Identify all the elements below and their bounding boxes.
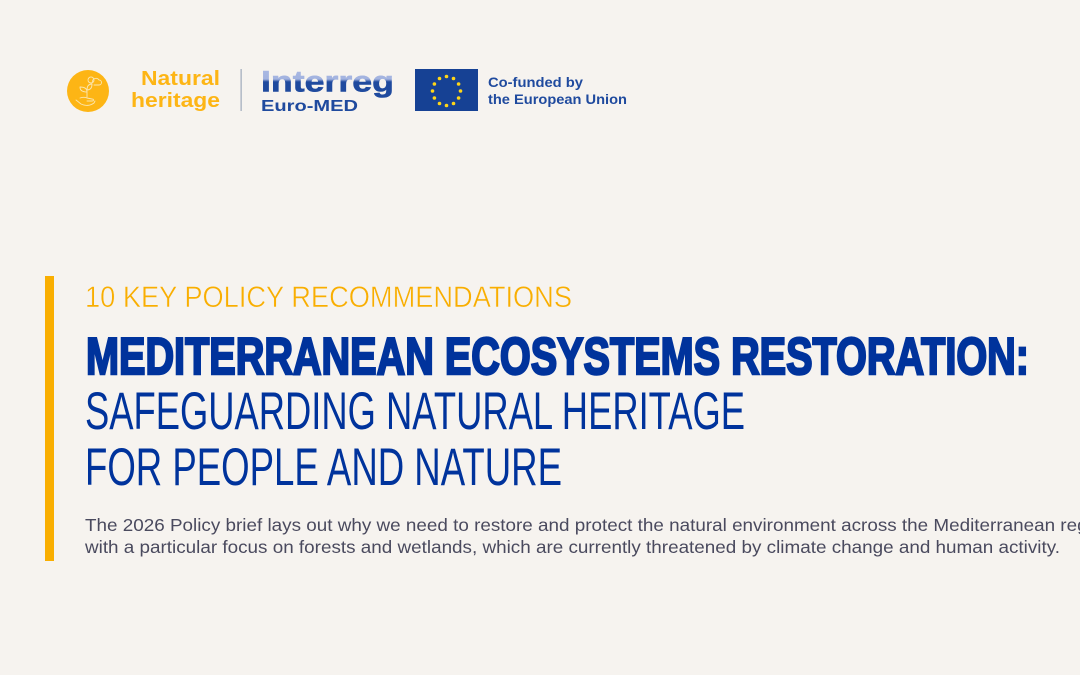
title subtitle lines: SAFEGUARDING NATURAL HERITAGE xyxy=(85,382,745,441)
icon: hand, plant and sun xyxy=(67,70,109,112)
title xyxy=(85,328,1029,497)
accent bar xyxy=(45,276,54,561)
logo wordmark xyxy=(131,68,220,112)
logo: Interreg Euro-MED: Euro-MED xyxy=(261,98,358,115)
kicker: 10 key policy recommendations: 10 KEY POLICY RECOMMENDATIONS xyxy=(85,281,572,314)
body text xyxy=(84,515,1080,557)
logo: Natural heritage xyxy=(67,68,220,112)
text: Co-funded by the European Union: Co-funded by xyxy=(488,74,583,90)
text: Co-funded by the European Union xyxy=(488,74,627,107)
logo: Interreg Euro-MED: Interreg xyxy=(261,66,394,98)
body text: with a particular focus on forests and wetlands, which are currently threatened by climate change and human activity. xyxy=(84,537,1060,557)
title subtitle lines xyxy=(85,382,745,497)
text: Co-funded by the European Union: the European Union xyxy=(488,91,627,107)
body text: The 2026 Policy brief lays out why we need to restore and protect the natural environment across the Mediterranean region, xyxy=(85,515,1080,535)
logo: Interreg Euro-MED xyxy=(261,66,394,115)
title subtitle lines: FOR PEOPLE AND NATURE xyxy=(85,438,562,497)
logo wordmark: Natural xyxy=(141,68,220,90)
logo wordmark: heritage xyxy=(131,90,220,112)
divider line xyxy=(241,69,242,111)
icon: EU flag xyxy=(415,69,478,111)
